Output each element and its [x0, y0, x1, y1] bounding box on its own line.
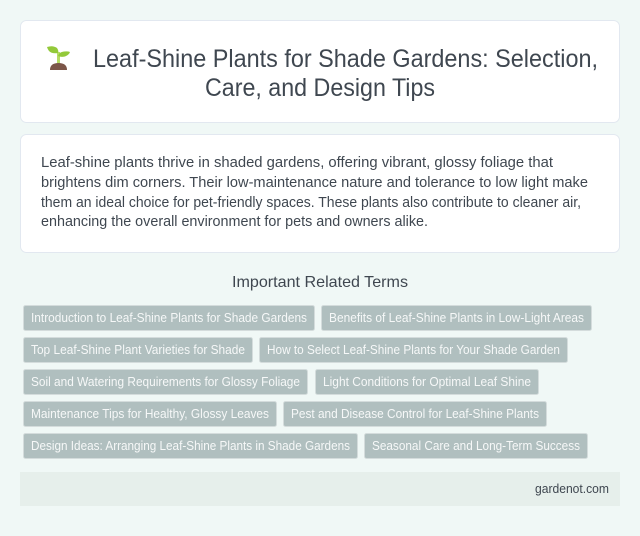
footer [20, 472, 620, 506]
tag: Introduction to Leaf-Shine Plants for Shade Gardens [31, 311, 307, 325]
tag [364, 434, 588, 458]
tag: Light Conditions for Optimal Leaf Shine [323, 375, 531, 389]
text block: description: brightens dim corners. Their low-maintenance nature and tolerance to low light make [41, 175, 588, 191]
tag [24, 370, 308, 394]
tag [260, 338, 568, 362]
tag [24, 306, 314, 330]
text block: description: them an ideal choice for pet-friendly spaces. These plants also contribute to cleaner air, [41, 195, 581, 211]
icon: seedling [47, 46, 70, 70]
text block: description: enhancing the overall environment for pets and owners alike. [41, 214, 428, 230]
text block: description [41, 155, 588, 230]
tag: Soil and Watering Requirements for Glossy Foliage [31, 375, 300, 389]
heading: related terms: Important Related Terms [232, 274, 408, 291]
tag [24, 402, 276, 426]
footer: site name: gardenot.com [535, 482, 609, 496]
panel: term tags [24, 306, 592, 458]
tag [24, 434, 358, 458]
tag: Benefits of Leaf-Shine Plants in Low-Light Areas [329, 311, 584, 325]
panel: title card [20, 20, 620, 122]
tag: Design Ideas: Arranging Leaf-Shine Plants in Shade Gardens [31, 439, 350, 453]
text block: description: Leaf-shine plants thrive in shaded gardens, offering vibrant, glossy foliage that [41, 155, 553, 171]
tag: How to Select Leaf-Shine Plants for Your Shade Garden [267, 343, 560, 357]
tag [24, 338, 252, 362]
tag: Seasonal Care and Long-Term Success [372, 439, 580, 453]
panel: description [20, 134, 620, 252]
tag: Maintenance Tips for Healthy, Glossy Leaves [31, 407, 269, 421]
tag: Pest and Disease Control for Leaf-Shine Plants [291, 407, 539, 421]
title: Care, and Design Tips [205, 74, 435, 102]
tag [284, 402, 546, 426]
tag [322, 306, 592, 330]
title: Leaf-Shine Plants for Shade Gardens: Selection, [93, 45, 598, 73]
tag: Top Leaf-Shine Plant Varieties for Shade [31, 343, 245, 357]
title [93, 45, 598, 102]
tag [316, 370, 538, 394]
